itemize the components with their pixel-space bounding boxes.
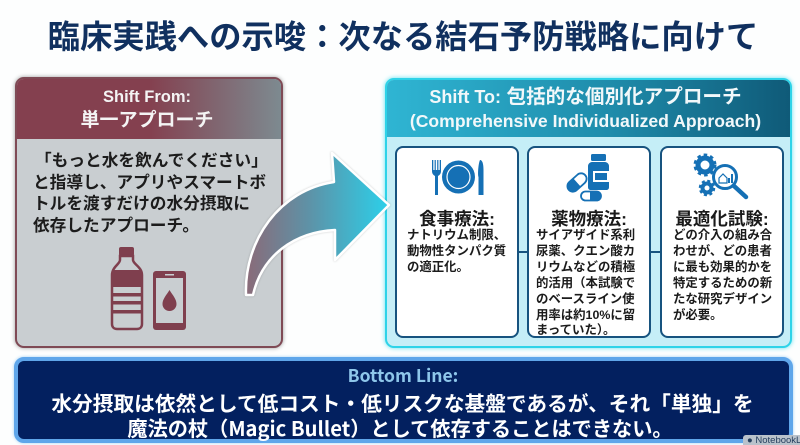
shift from description bbox=[33, 151, 268, 235]
card body: リウムなどの積極 bbox=[536, 260, 635, 274]
card body: 動物性タンパク質 bbox=[407, 244, 506, 258]
arrow: shift from to shift to bbox=[244, 151, 391, 298]
shift to heading line 1: Shift To: 包括的な個別化アプローチ bbox=[429, 86, 742, 108]
panel: bottom line bbox=[14, 357, 793, 443]
bottom line label: Bottom Line: bbox=[348, 363, 458, 388]
panel: shift to bbox=[385, 78, 792, 348]
icon: water bottle bbox=[110, 247, 144, 330]
card: pharmacotherapy bbox=[527, 146, 651, 338]
shift from description: 「もっと水を飲んでください」 bbox=[35, 151, 268, 170]
shift from description: トルを渡すだけの水分摂取に bbox=[33, 194, 250, 213]
icon: smartphone with drop bbox=[153, 271, 186, 330]
panel: shift from bbox=[15, 77, 283, 348]
card body: サイアザイド系利 bbox=[536, 228, 635, 242]
card: diet therapy bbox=[395, 146, 519, 338]
card heading: 薬物療法: bbox=[551, 209, 627, 229]
connector: card 2 to card 3 bbox=[649, 251, 661, 253]
shift to heading line 2: (Comprehensive Individualized Approach) bbox=[410, 111, 761, 131]
connector: card 1 to card 2 bbox=[517, 251, 529, 253]
card body: わせが、どの患者 bbox=[673, 244, 772, 258]
shift from heading line 1: Shift From: bbox=[103, 88, 191, 106]
bottom line message line 1: 水分摂取は依然として低コスト・低リスクな基盤であるが、それ「単独」を bbox=[51, 387, 754, 417]
card body: どの介入の組み合 bbox=[673, 228, 772, 242]
card body bbox=[673, 228, 772, 322]
shift from header bbox=[17, 79, 281, 139]
card body: に最も効果的かを bbox=[673, 260, 772, 274]
card: optimization trial bbox=[660, 146, 784, 338]
card body: のベースライン使 bbox=[536, 292, 635, 306]
card body: たな研究デザイン bbox=[673, 292, 772, 306]
card body: の適正化。 bbox=[407, 260, 469, 274]
card body: が必要。 bbox=[673, 308, 723, 322]
card body: 尿薬、クエン酸カ bbox=[536, 244, 635, 258]
card body: 用率は約10%に留 bbox=[536, 308, 635, 322]
card heading: 食事療法: bbox=[419, 209, 495, 229]
card body: 的活用（本試験で bbox=[536, 276, 635, 290]
shift from description: と指導し、アプリやスマートボ bbox=[33, 173, 266, 192]
bottom line message line 2: 魔法の杖（Magic Bullet）として依存することはできない。 bbox=[127, 413, 673, 442]
shift to header bbox=[387, 80, 790, 137]
icon: plate and cutlery bbox=[432, 160, 484, 195]
icon: pill bottle and capsules bbox=[566, 154, 609, 202]
card body: ナトリウム制限、 bbox=[407, 228, 506, 242]
card heading: 最適化試験: bbox=[675, 209, 769, 229]
title: 臨床実践への示唆：次なる結石予防戦略に向けて bbox=[48, 19, 758, 55]
shift from heading line 2: 単一アプローチ bbox=[80, 110, 214, 131]
card body bbox=[407, 228, 506, 274]
card body: 特定するための新 bbox=[673, 276, 772, 290]
card body: まっていた）。 bbox=[536, 323, 615, 337]
icon: gears and magnifier bbox=[694, 154, 748, 200]
shift from description: 依存したアプローチ。 bbox=[33, 216, 199, 235]
card body bbox=[536, 228, 635, 337]
